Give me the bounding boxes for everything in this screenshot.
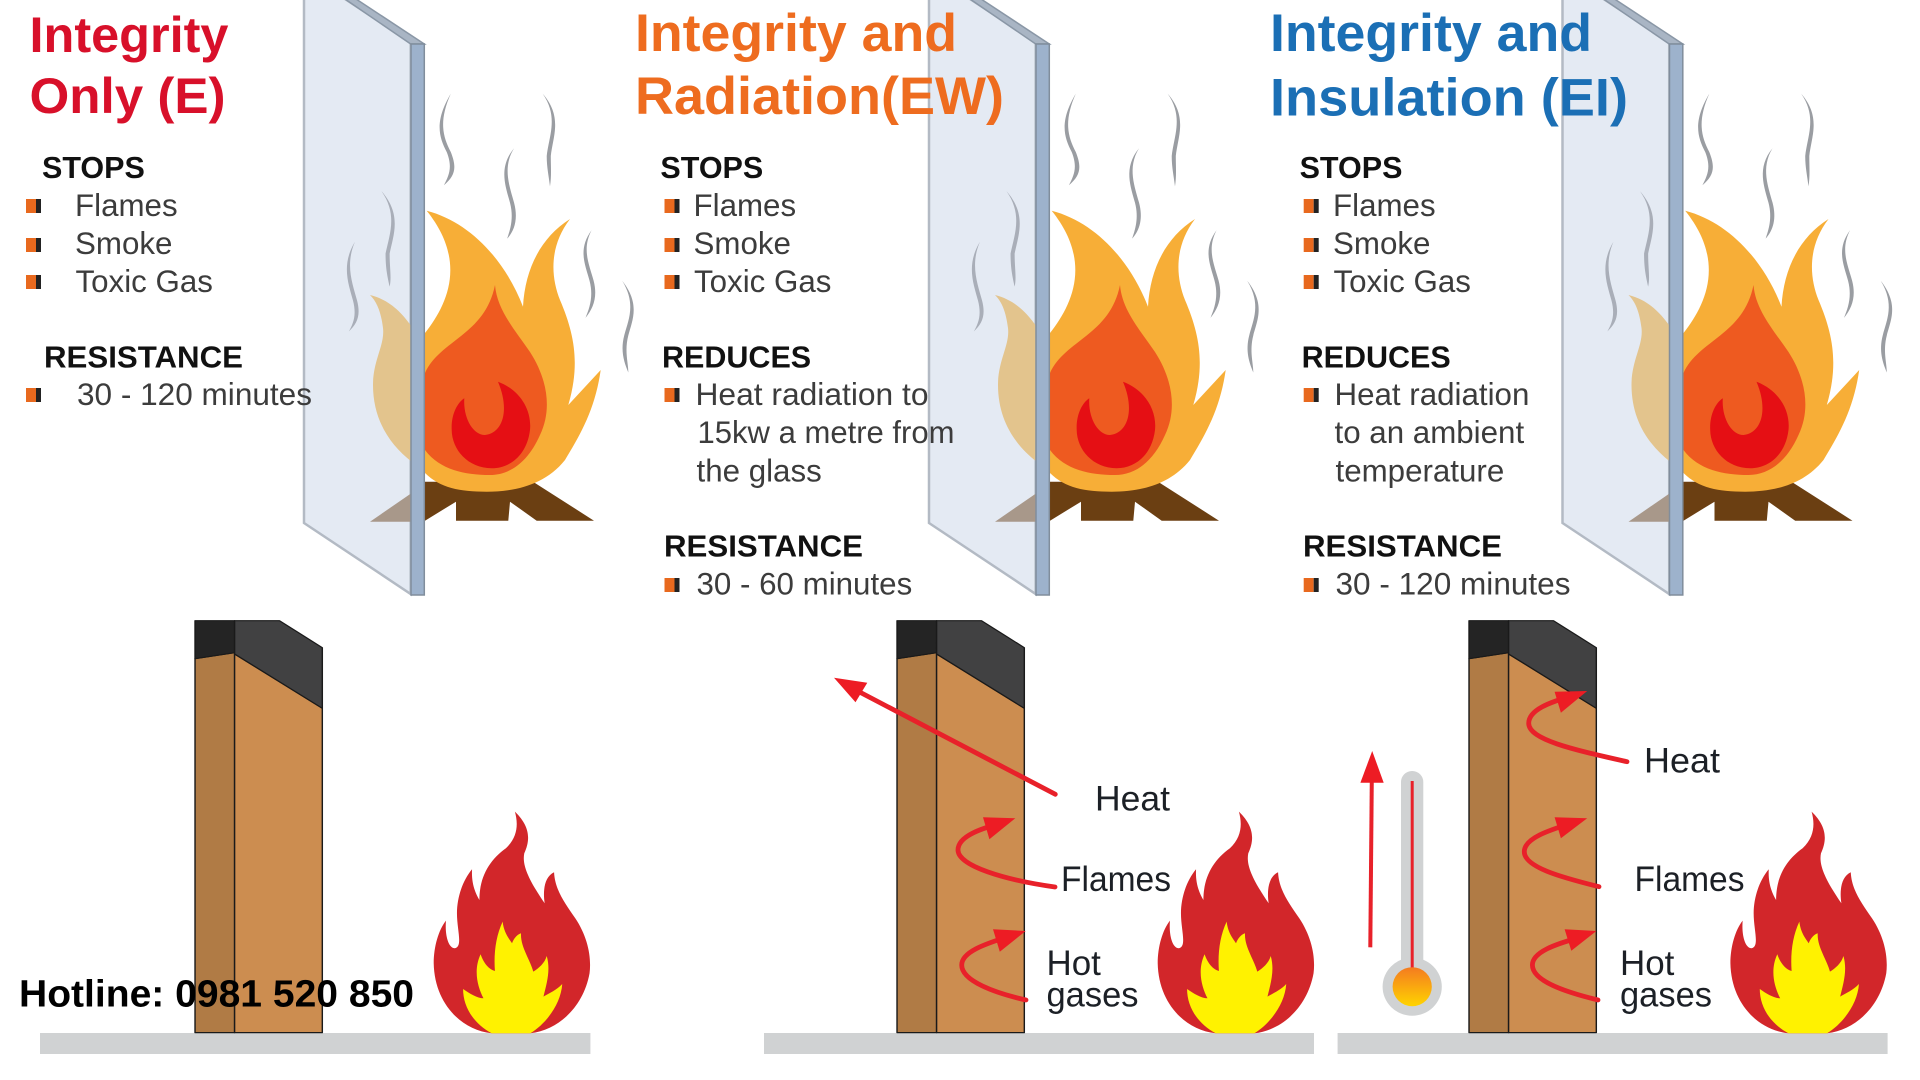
arrow: hot gases blocked, middle	[962, 929, 1026, 1000]
icon: flame left	[434, 812, 590, 1033]
title: Integrity and Radiation (EW): Integrity and	[635, 4, 957, 63]
icon: thermometer	[1383, 771, 1442, 1016]
label: Heat middle: Heat	[1095, 780, 1170, 819]
title: Integrity and Insulation (EI)	[1270, 4, 1628, 128]
icon: flame right	[1730, 812, 1887, 1033]
text block: EI specifications: Heat radiation	[1334, 377, 1529, 412]
ground bar: right	[1338, 1033, 1888, 1054]
title: Integrity and Insulation (EI): Insulation (EI)	[1270, 68, 1628, 128]
arrow: hot gases blocked, right	[1532, 929, 1598, 1000]
text block: EW specifications: Smoke	[694, 226, 791, 261]
text block: EI specifications: REDUCES	[1302, 340, 1451, 374]
label: Hot gases right: Hot	[1620, 944, 1675, 983]
text block: EW specifications: Toxic Gas	[694, 264, 831, 299]
text block: E specifications: Toxic Gas	[76, 264, 213, 299]
label: Hot gases right	[1620, 944, 1712, 1015]
label: Hot gases middle: Hot	[1046, 944, 1101, 983]
text block: EW specifications: 30 - 60 minutes	[696, 566, 912, 602]
text block: EI specifications: to an ambient	[1334, 415, 1524, 450]
ground bar: left	[40, 1033, 590, 1054]
label: Hot gases middle	[1046, 944, 1138, 1015]
text block: EI specifications: temperature	[1336, 454, 1504, 488]
panel: integrity only (E) glass illustration	[304, 0, 634, 595]
text block: EW specifications	[660, 151, 954, 602]
text block: EI specifications: STOPS	[1300, 151, 1402, 185]
label: Flames right: Flames	[1634, 860, 1744, 899]
title: Integrity Only (E): Integrity	[30, 7, 229, 63]
text block: EW specifications: REDUCES	[662, 340, 811, 374]
label: Heat right: Heat	[1644, 741, 1720, 780]
text block: E specifications: STOPS	[42, 151, 145, 185]
text block: EW specifications: 15kw a metre from	[698, 415, 954, 450]
text block: EW specifications: STOPS	[660, 151, 763, 185]
text block: EW specifications: RESISTANCE	[664, 530, 863, 564]
text block: E specifications: 30 - 120 minutes	[77, 377, 312, 412]
wall: right	[1469, 621, 1596, 1033]
label: Hot gases middle: gases	[1046, 976, 1138, 1015]
panel: integrity and insulation (EI) glass illustration	[1562, 0, 1892, 595]
text block: EW specifications: Heat radiation to	[696, 377, 928, 412]
text block: EW specifications: the glass	[696, 454, 822, 488]
text block: EI specifications: RESISTANCE	[1303, 530, 1502, 564]
arrow: flames blocked, middle	[958, 817, 1055, 887]
wall: middle	[897, 621, 1024, 1033]
arrow: heat blocked, right	[1529, 691, 1627, 762]
text block: E specifications: RESISTANCE	[44, 340, 243, 374]
arrow: flames blocked, right	[1524, 817, 1599, 887]
arrow: heat passing through wall	[834, 678, 1055, 794]
text block: E specifications: Flames	[75, 188, 178, 223]
text block: EI specifications: 30 - 120 minutes	[1336, 566, 1570, 602]
title: Integrity Only (E)	[30, 7, 229, 124]
label: Hot gases right: gases	[1620, 976, 1712, 1015]
wall: left	[195, 621, 322, 1033]
icon: flame middle	[1158, 812, 1314, 1033]
arrow: temperature rising	[1360, 751, 1384, 947]
text block: EI specifications	[1300, 151, 1570, 602]
title: Integrity Only (E): Only (E)	[30, 68, 226, 124]
title: Integrity and Insulation (EI): Integrity and	[1270, 4, 1592, 63]
text block: EI specifications: Smoke	[1333, 226, 1430, 261]
panel: integrity and radiation (EW) glass illustration	[929, 0, 1259, 595]
title: Integrity and Radiation (EW)	[635, 4, 1004, 126]
text block: EW specifications: Flames	[694, 188, 796, 223]
ground bar: middle	[764, 1033, 1314, 1054]
text block: EI specifications: Toxic Gas	[1334, 264, 1471, 299]
title: Integrity and Radiation (EW): Radiation(EW)	[635, 67, 1004, 126]
text block: EI specifications: Flames	[1333, 188, 1436, 223]
hotline: Hotline: 0981 520 850	[19, 974, 414, 1016]
text block: E specifications: Smoke	[75, 226, 172, 261]
label: Flames middle: Flames	[1061, 860, 1171, 899]
text block: E specifications	[26, 151, 312, 412]
